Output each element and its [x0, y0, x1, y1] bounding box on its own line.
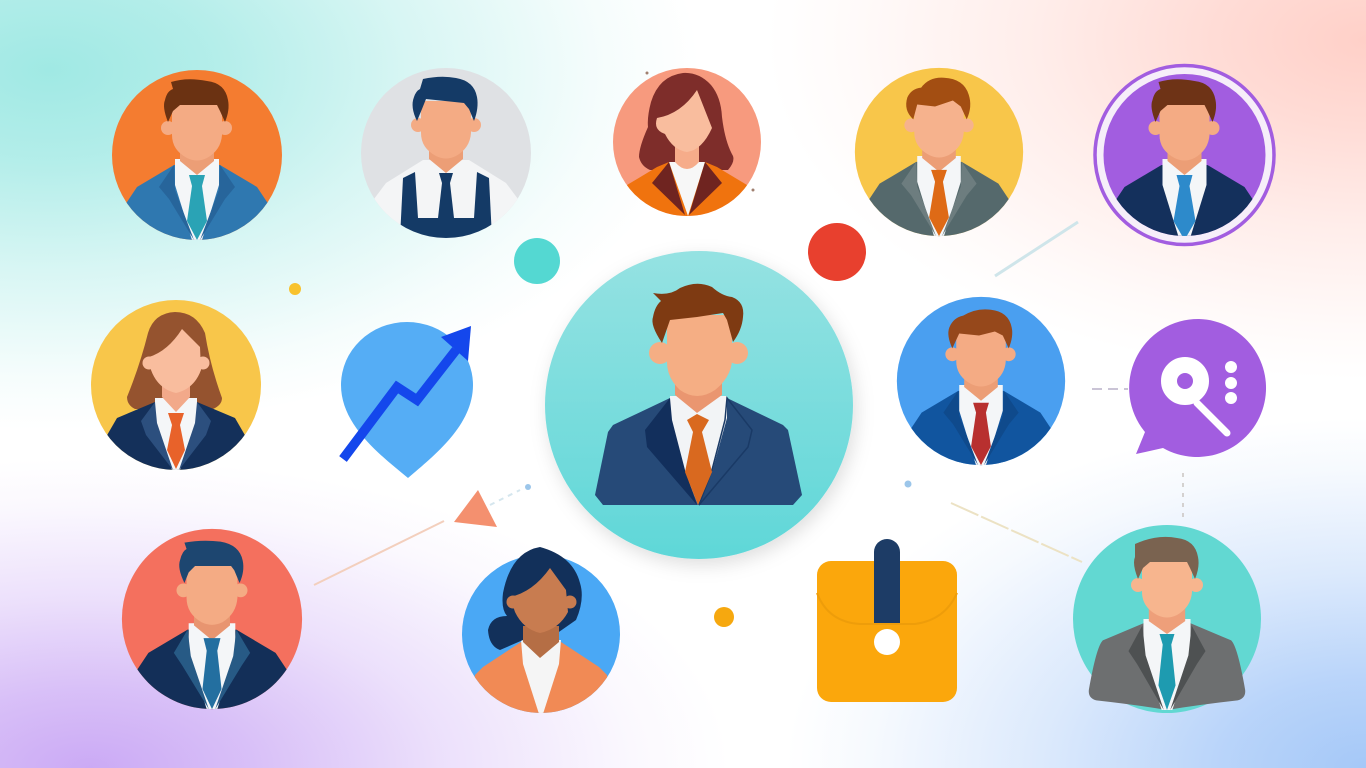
infographic artwork — [91, 64, 1276, 713]
dot: amber — [714, 607, 734, 627]
central avatar — [545, 251, 853, 559]
dot: red — [808, 223, 866, 281]
dot: small yellow — [289, 283, 301, 295]
avatar: man on teal — [1073, 525, 1261, 713]
avatar: man on yellow — [855, 68, 1023, 241]
icon: purple speech bubble with magnifier — [1129, 319, 1266, 457]
connector dashes: triangle — [490, 490, 520, 505]
icon: growth arrow on blue shield — [341, 322, 473, 478]
avatar: man in apron on grey — [361, 68, 531, 243]
avatar: man on purple with ring — [1095, 66, 1274, 245]
connector dashes: speech bubble below — [1182, 473, 1184, 520]
avatar: man on orange — [112, 70, 282, 245]
connector line: lower left — [314, 521, 444, 585]
avatar: man on blue — [897, 297, 1065, 470]
dot: tiny speck lower — [752, 188, 754, 192]
dot: small blue left — [525, 484, 531, 490]
connector dashes: speech bubble left — [1092, 388, 1128, 390]
dot: small blue right — [904, 480, 912, 488]
avatar: woman on yellow — [91, 300, 261, 475]
avatar: man on coral — [122, 529, 302, 714]
avatar: woman on blue — [462, 547, 620, 719]
avatar: woman on salmon — [613, 68, 761, 222]
connector line: upper right — [995, 222, 1078, 276]
triangle — [454, 490, 497, 527]
icon: yellow envelope with exclamation — [817, 539, 957, 702]
dot: tiny speck upper — [646, 72, 648, 74]
dot: teal — [514, 238, 560, 284]
connector line: lower right — [951, 503, 1082, 562]
